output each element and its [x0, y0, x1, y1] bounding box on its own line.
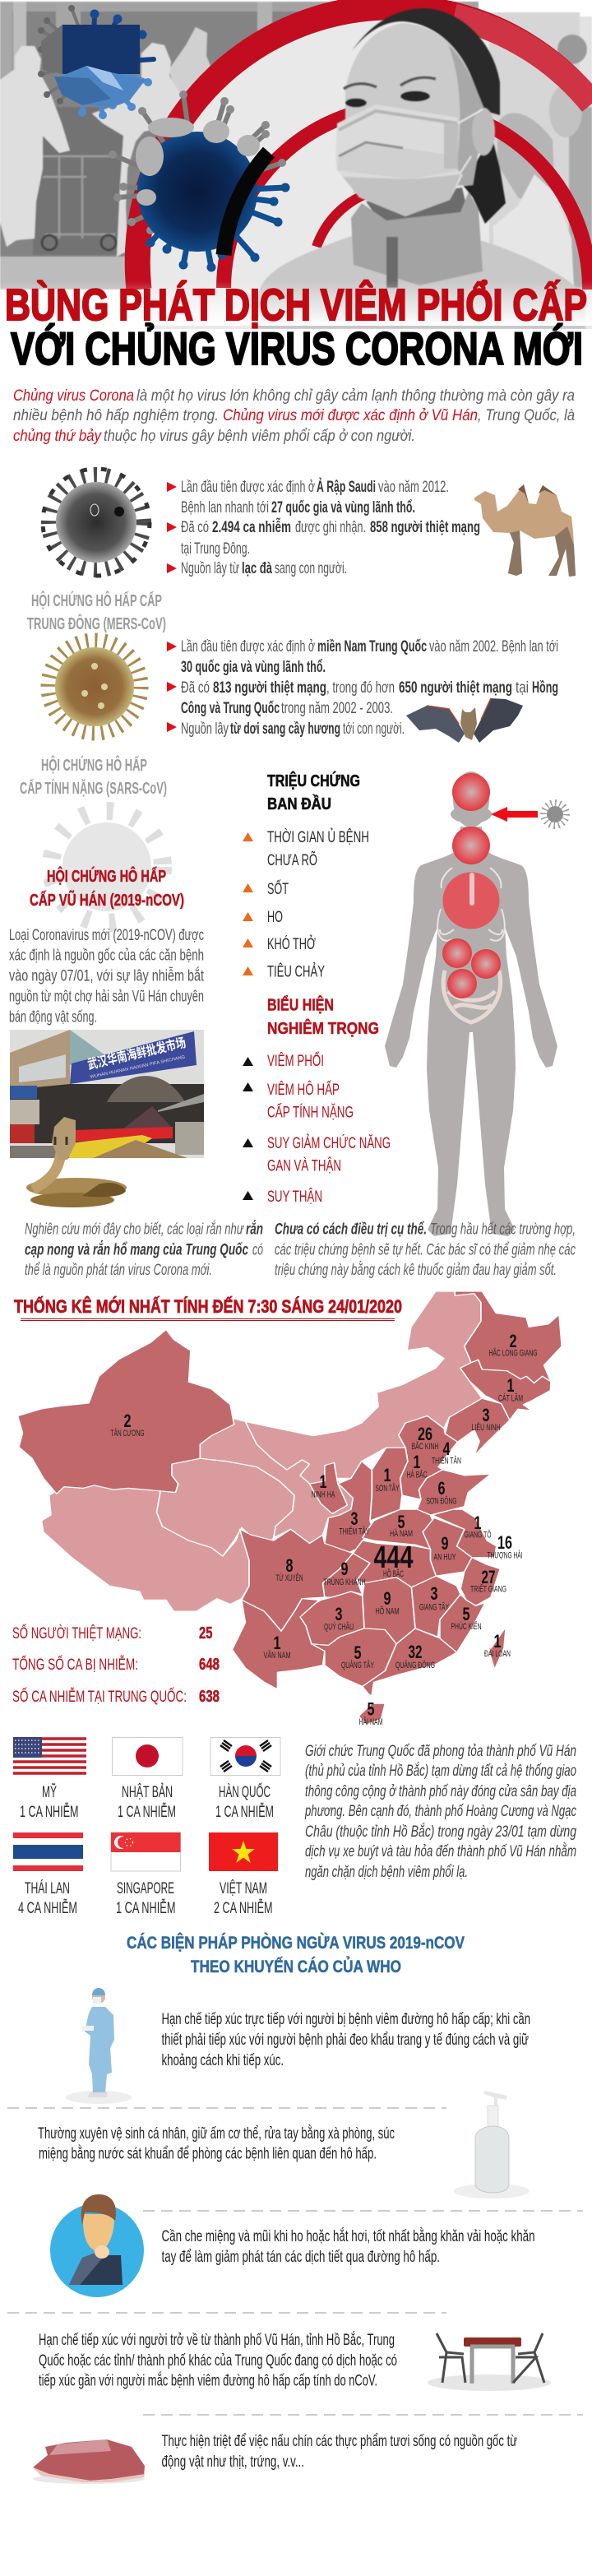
case numbers: 1	[383, 1465, 391, 1485]
text: measure 4	[39, 2330, 397, 2390]
case numbers	[123, 1331, 516, 1719]
province labels: VÂN NAM	[263, 1650, 291, 1661]
province labels: ĐÀI LOAN	[484, 1648, 511, 1659]
province labels: GIANG TÔ	[464, 1530, 492, 1541]
list: initial symptoms: SỐT	[267, 880, 289, 898]
text: measure 3	[161, 2226, 534, 2266]
flag: Thailand	[13, 1832, 83, 1871]
panel: SARS facts: , trong đó hơn	[326, 679, 395, 697]
face	[345, 23, 485, 193]
panel: MERS facts	[167, 477, 480, 577]
heading: MERS-CoV: TRUNG ĐÔNG (MERS-CoV)	[27, 614, 166, 633]
labels: Thailand, Singapore, Vietnam	[18, 1879, 273, 1917]
health workers in protective suits	[0, 27, 212, 257]
panel: SARS facts: từ dơi sang cầy hương	[230, 720, 340, 738]
province labels: TRÙNG KHÁNH	[324, 1577, 366, 1587]
text: treatment note: Chưa có cách điều trị cụ thể.	[275, 1221, 427, 1239]
heading: SARS-CoV: CẤP TÍNH NẶNG (SARS-CoV)	[20, 779, 167, 798]
intro text: Chủng virus mới được xác định ở Vũ Hán	[223, 406, 478, 424]
province labels: HÀ BẮC	[406, 1470, 428, 1480]
case numbers: 3	[350, 1508, 358, 1529]
heading: 2019-nCoV: CẤP VŨ HÁN (2019-nCOV)	[30, 890, 184, 910]
labels: Thailand, Singapore, Vietnam: SINGAPORE	[117, 1880, 174, 1897]
list: severe signs: VIÊM HÔ HẤP	[267, 1081, 340, 1099]
panel: SARS facts: Đã có	[181, 679, 210, 697]
province labels: TỨ XUYÊN	[276, 1573, 303, 1583]
panel: summary figures: SỐ NGƯỜI THIỆT MẠNG:	[12, 1624, 141, 1642]
text: measure 2: miệng bằng nước sát khuẩn để phòng các bệnh liên quan đến hô hấp.	[39, 2143, 377, 2162]
text: 2019-nCoV description: Loại Coronavirus mới (2019-nCOV) được	[9, 926, 204, 944]
case numbers: 16	[497, 1532, 512, 1553]
mask	[335, 104, 464, 200]
intro text: , Trung Quốc, là	[478, 406, 575, 424]
intro text: nhiều bệnh hô hấp nghiệm trọng.	[13, 406, 219, 424]
icon: cobra	[26, 1117, 127, 1207]
province labels: SƠN TÂY	[375, 1483, 400, 1494]
panel: SARS facts: Nguồn lây	[181, 720, 229, 738]
labels: USA, Japan, Korea: HÀN QUỐC	[219, 1783, 271, 1801]
text: snakes note: Nghiên cứu mới đây cho biết, các loại rắn như	[25, 1220, 244, 1239]
flag: USA	[13, 1737, 86, 1775]
text: measure 2: Thường xuyên vệ sinh cá nhân, giữ ấm cơ thể, rửa tay bằng xà phòng, súc	[38, 2124, 395, 2143]
text: 2019-nCoV description: bán động vật sống.	[9, 1008, 97, 1026]
case numbers: 3	[482, 1405, 490, 1425]
province labels: THIÊN TÂN	[432, 1455, 461, 1466]
icon: bat	[406, 698, 523, 743]
province labels: HỒ BẮC	[383, 1568, 404, 1579]
flag: Japan	[112, 1737, 183, 1775]
text: treatment note	[275, 1221, 576, 1279]
panel: summary figures: 648	[199, 1656, 220, 1674]
province labels: THIỂM TÂY	[339, 1527, 370, 1536]
text: Wuhan lockdown: ngăn chặn dịch bệnh viêm phổi lạ.	[305, 1863, 468, 1881]
case numbers: 4	[442, 1439, 451, 1459]
photo: Huanan seafood market: WUHAN HUANAN HAIXIAN PIFA SHICHANG	[90, 1055, 186, 1080]
labels: USA, Japan, Korea: MỸ	[42, 1783, 57, 1801]
collar	[351, 192, 483, 285]
text: measure 4: Quốc hoặc các tỉnh/ thành phố khác của Trung Quốc đang có dịch hoặc có	[39, 2351, 397, 2370]
panel: MERS facts: tại Trung Đông.	[181, 540, 250, 558]
photo right	[489, 12, 592, 288]
text: 2019-nCoV description: nguồn từ một chợ hải sản Vũ Hán chuyên	[9, 987, 204, 1005]
text: measure 4: tiếp xúc gần với người mắc bệnh viêm đường hô hấp cấp tính do nCoV.	[39, 2371, 377, 2390]
province labels: HẢI NAM	[358, 1717, 383, 1727]
text: measure 5	[161, 2432, 517, 2471]
province labels: LIÊU NINH	[472, 1422, 501, 1433]
case numbers: 5	[462, 1604, 470, 1624]
case numbers: 1	[506, 1375, 515, 1396]
heading: MERS-CoV	[27, 591, 166, 633]
case numbers: 3	[335, 1604, 342, 1624]
icon: table and chairs	[428, 2333, 551, 2391]
labels: Thailand, Singapore, Vietnam: THÁI LAN	[25, 1880, 70, 1897]
panel: summary figures: TỔNG SỐ CA BỊ NHIỄM:	[12, 1656, 138, 1674]
province labels: HẮC LONG GIANG	[488, 1347, 538, 1359]
labels: USA, Japan, Korea	[20, 1783, 274, 1821]
province labels: HÀ NAM	[390, 1528, 413, 1539]
case numbers: 5	[367, 1699, 375, 1719]
province labels: CÁT LÂM	[498, 1393, 523, 1404]
labels: Thailand, Singapore, Vietnam: 1 CA NHIỄM	[116, 1899, 176, 1917]
flag: Vietnam	[209, 1832, 278, 1871]
text: measure 1: khoảng cách khi tiếp xúc.	[161, 2051, 284, 2069]
icon: small virus	[543, 803, 567, 826]
overlay: ring over right photo	[454, 16, 592, 104]
intro text: Chủng virus Corona	[13, 387, 134, 405]
list: severe signs: GAN VÀ THẬN	[267, 1157, 341, 1175]
panel: SARS facts	[167, 637, 558, 738]
province labels: QUÝ CHÂU	[324, 1622, 354, 1632]
heading: prevention measures	[127, 1933, 465, 1976]
heading: initial symptoms	[267, 771, 360, 813]
case numbers: 26	[418, 1424, 432, 1444]
text: 2019-nCoV description: vào ngày 07/01, với sự lây nhiễm bắt	[9, 966, 204, 985]
case numbers: 8	[286, 1555, 293, 1576]
province labels: QUẢNG TÂY	[341, 1660, 374, 1670]
panel: summary figures	[12, 1624, 220, 1706]
fade to white below photo	[0, 281, 592, 326]
body diagram	[385, 771, 567, 1236]
provinces	[18, 1291, 562, 1725]
icon: doctor	[66, 1988, 132, 2104]
labels: USA, Japan, Korea: 1 CA NHIỄM	[118, 1803, 176, 1821]
labels: USA, Japan, Korea: 1 CA NHIỄM	[20, 1803, 79, 1821]
list: initial symptoms	[243, 828, 369, 980]
large blue virus	[113, 95, 285, 267]
heading: severe signs: NGHIÊM TRỌNG	[267, 1018, 379, 1038]
panel: MERS facts: sang con người.	[275, 559, 347, 577]
panel: SARS facts: 650 người thiệt mạng	[399, 679, 512, 697]
province labels: BẮC KINH	[411, 1441, 439, 1452]
panel: symptoms list	[243, 771, 391, 1206]
list: severe signs: CẤP TÍNH NẶNG	[267, 1104, 354, 1122]
list: severe signs: SUY THẬN	[267, 1188, 322, 1206]
province labels: AN HUY	[434, 1553, 456, 1563]
heading: 2019-nCoV	[30, 866, 184, 910]
red rings	[137, 7, 592, 290]
arrow: virus entering	[491, 807, 538, 822]
case numbers: 444	[373, 1541, 413, 1575]
heading: SARS-CoV	[20, 755, 167, 798]
panel: MERS facts: 858 người thiệt mạng	[370, 518, 480, 536]
province labels	[110, 1347, 538, 1727]
icon: faded virus	[51, 811, 163, 923]
panel: SARS facts: Hồng	[532, 679, 558, 697]
neck	[365, 187, 465, 221]
heading: initial symptoms: TRIỆU CHỨNG	[267, 771, 360, 790]
case numbers: 27	[482, 1567, 495, 1587]
panel: cases abroad	[13, 1737, 280, 1917]
white disc inside outer ring	[141, 20, 592, 329]
panel: SARS facts: Lần đầu tiên được xác định ở	[181, 637, 315, 656]
silhouette	[385, 771, 557, 1236]
woman wearing mask	[257, 8, 585, 329]
list: initial symptoms: CHƯA RÕ	[267, 851, 317, 869]
title	[5, 280, 587, 374]
case numbers: 32	[408, 1642, 423, 1662]
text: Wuhan lockdown	[304, 1742, 576, 1881]
list: severe signs	[243, 1052, 391, 1206]
case numbers: 5	[398, 1512, 405, 1532]
labels: USA, Japan, Korea: NHẬT BẢN	[122, 1783, 173, 1801]
flag: South Korea	[210, 1737, 280, 1775]
text: snakes note: có	[252, 1241, 263, 1259]
text: 2019-nCoV description: xác định là nguồn gốc của các căn bệnh	[9, 946, 204, 964]
list: initial symptoms: THỜI GIAN Ủ BỆNH	[267, 828, 369, 846]
case numbers: 5	[354, 1642, 362, 1663]
text: 2019-nCoV description	[9, 926, 204, 1026]
case numbers: 2	[510, 1331, 516, 1351]
intro text: thuộc họ virus gây bệnh viêm phổi cấp ở con người.	[104, 427, 415, 445]
text: measure 2	[38, 2124, 395, 2162]
province labels: GIANG TÂY	[419, 1601, 449, 1612]
heading: latest statistics: THỐNG KÊ MỚI NHẤT TÍNH ĐẾN 7:30 SÁNG 24/01/2020	[14, 1295, 402, 1317]
panel: SARS facts: tới con người.	[343, 720, 405, 738]
province labels: PHÚC KIẾN	[451, 1621, 482, 1632]
icon: sanitizer bottle	[454, 2091, 530, 2198]
panel: MERS facts: vào năm 2012.	[378, 478, 449, 496]
list: severe signs: VIÊM PHỔI	[267, 1052, 324, 1070]
icon: camel	[474, 484, 576, 577]
text: snakes note: thể là nguồn phát tán virus Corona mới.	[25, 1261, 212, 1279]
province labels: NINH HẠ	[311, 1490, 335, 1500]
case numbers: 2	[123, 1411, 132, 1431]
background photo left	[0, 2, 479, 290]
panel: SARS facts: 30 quốc gia và vùng lãnh thổ.	[181, 658, 326, 676]
ribs and intestines	[437, 868, 505, 1022]
labels: Thailand, Singapore, Vietnam: 2 CA NHIỄM	[214, 1899, 273, 1917]
panel: MERS facts: Lần đầu tiên được xác định ở	[181, 478, 315, 496]
text: measure 1	[161, 2010, 530, 2069]
panel: MERS facts: Đã có	[181, 518, 209, 536]
case numbers: 1	[493, 1631, 502, 1652]
heading: SARS-CoV: HỘI CHỨNG HÔ HẤP	[41, 755, 147, 775]
panel: MERS facts: 2.494 ca nhiễm	[212, 517, 291, 536]
list: initial symptoms: KHÓ THỞ	[267, 935, 316, 953]
case numbers: 1	[474, 1513, 482, 1533]
list: initial symptoms: TIÊU CHẢY	[267, 962, 325, 980]
panel: MERS facts: Bệnh lan nhanh tới	[181, 498, 269, 517]
case numbers: 9	[340, 1559, 349, 1579]
case numbers: 1	[273, 1633, 281, 1653]
province labels: TRIẾT GIANG	[470, 1584, 506, 1595]
case numbers: 1	[413, 1452, 421, 1472]
province labels: SƠN ĐÔNG	[426, 1495, 457, 1506]
brows and eyes	[344, 77, 436, 89]
case numbers: 3	[431, 1583, 437, 1604]
panel: Wuhan 2019-nCoV	[9, 811, 204, 1207]
jacket	[257, 236, 585, 329]
small blue virus	[41, 8, 154, 115]
ear	[472, 108, 495, 155]
heading: severe signs	[267, 995, 379, 1038]
heading: MERS-CoV: HỘI CHỨNG HÔ HẤP CẤP	[31, 591, 162, 610]
icon: raw meat	[33, 2439, 145, 2484]
province labels: THƯỢNG HẢI	[487, 1550, 523, 1560]
case numbers: 9	[383, 1588, 391, 1609]
panel: MERS facts: 27 quốc gia và vùng lãnh thổ.	[271, 498, 415, 517]
panel: summary figures: 638	[199, 1688, 220, 1706]
labels: USA, Japan, Korea: 1 CA NHIỄM	[215, 1803, 274, 1821]
panel: summary figures: 25	[199, 1624, 212, 1642]
icon: MERS virus	[43, 469, 150, 576]
panel: MERS facts: lạc đà	[242, 559, 272, 577]
text: snakes note: cạp nong và rắn hổ mang của Trung Quốc	[25, 1240, 248, 1259]
text: measure 4: Hạn chế tiếp xúc với người trở về từ thành phố Vũ Hán, tỉnh Hồ Bắc, Trung	[39, 2330, 395, 2349]
intro text	[13, 387, 575, 445]
photo: Huanan seafood market	[10, 1030, 204, 1158]
panel: SARS facts: Công và Trung Quốc	[181, 699, 280, 717]
text: snakes note	[25, 1220, 263, 1279]
province labels: HỒ NAM	[375, 1606, 400, 1617]
organ highlights	[442, 773, 501, 998]
heading: initial symptoms: BAN ĐẦU	[267, 795, 331, 813]
case numbers: 6	[437, 1478, 446, 1499]
hero photo collage	[0, 0, 592, 329]
panel: SARS facts: tại	[516, 679, 529, 697]
heading: severe signs: BIỂU HIỆN	[267, 995, 334, 1015]
heading: prevention measures: THEO KHUYẾN CÁO CỦA WHO	[191, 1957, 401, 1976]
chest detail	[469, 875, 474, 903]
intro text: chủng thứ bảy	[13, 427, 102, 445]
icon: person coughing	[50, 2194, 144, 2297]
labels: Thailand, Singapore, Vietnam: 4 CA NHIỄM	[18, 1899, 77, 1917]
text: measure 3: tay để làm giảm phát tán các dịch tiết qua đường hô hấp.	[161, 2248, 440, 2266]
text: measure 5: động vật như thịt, trứng, v.v...	[161, 2453, 304, 2471]
photo: Huanan seafood market: 武汉华南海鲜批发市场	[86, 1035, 187, 1073]
panel: summary figures: SỐ CA NHIỄM TẠI TRUNG QUỐC:	[12, 1688, 187, 1706]
panel: MERS facts: Ả Rập Saudi	[317, 477, 376, 496]
list: severe signs: SUY GIẢM CHỨC NĂNG	[267, 1134, 391, 1152]
province labels: QUẢNG ĐÔNG	[395, 1660, 435, 1670]
flag: Singapore	[111, 1832, 181, 1871]
map of China	[18, 1291, 562, 1727]
province labels: TÂN CƯƠNG	[110, 1428, 145, 1439]
panel: SARS facts: miền Nam Trung Quốc	[317, 637, 427, 656]
panel: MERS facts: được ghi nhận.	[295, 518, 366, 536]
text: snakes note: rắn	[246, 1220, 263, 1239]
hair back	[463, 136, 506, 224]
heading: 2019-nCoV: HỘI CHỨNG HÔ HẤP	[47, 866, 166, 886]
list: initial symptoms: HO	[267, 909, 283, 926]
stretcher trolley	[43, 156, 115, 239]
case numbers: 1	[319, 1471, 327, 1492]
heading: prevention measures: CÁC BIỆN PHÁP PHÒNG NGỪA VIRUS 2019-nCOV	[127, 1933, 465, 1953]
hair band	[352, 8, 500, 115]
panel: SARS facts: 813 người thiệt mạng	[213, 679, 326, 697]
panel: MERS facts: Nguồn lây từ	[181, 559, 239, 577]
labels: Thailand, Singapore, Vietnam: VIỆT NAM	[220, 1879, 267, 1897]
case numbers: 9	[441, 1533, 449, 1554]
icon: SARS virus	[49, 641, 141, 733]
panel: SARS facts: trong năm 2002 - 2003.	[281, 699, 393, 717]
